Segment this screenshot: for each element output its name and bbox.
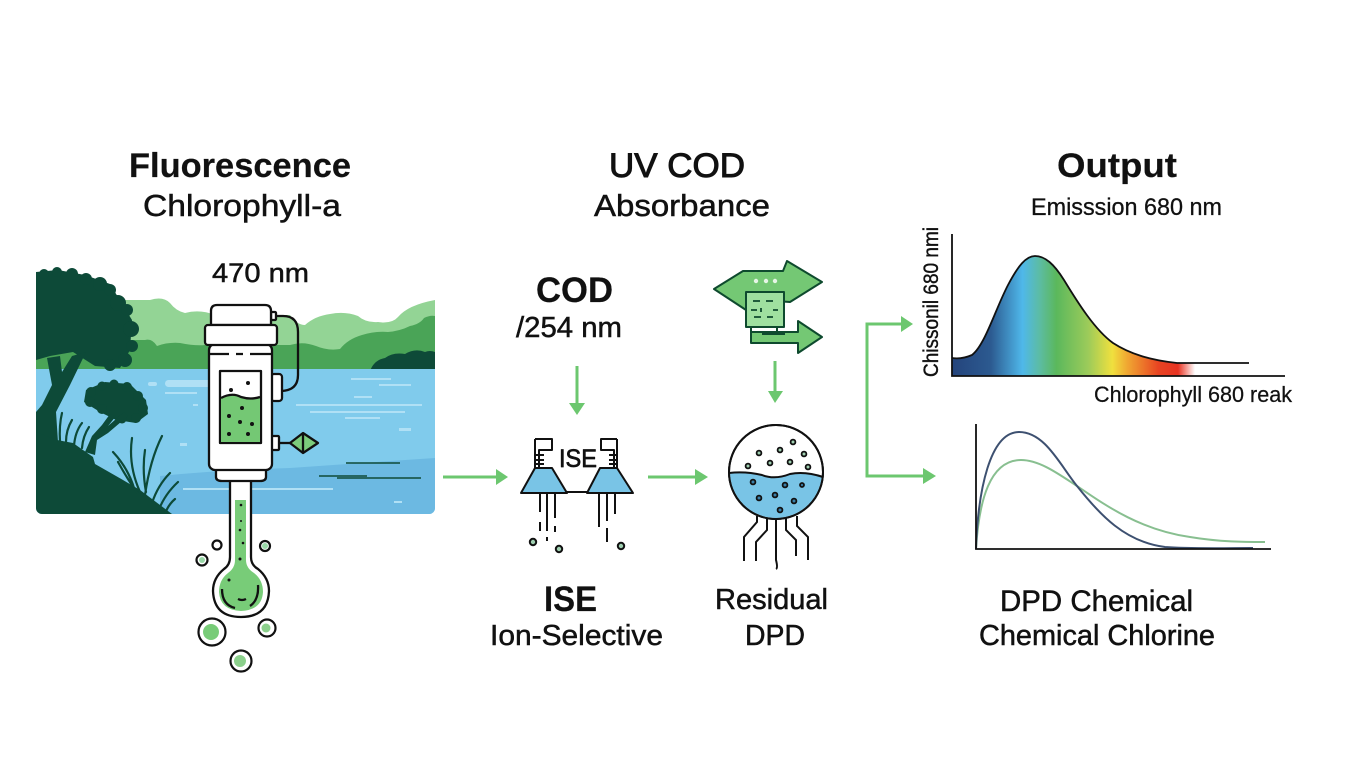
heading: Output: Output — [1057, 147, 1177, 185]
label: DPD Chemical Chlorine — [979, 585, 1215, 652]
heading: Fluorescence Chlorophyll-a: Chlorophyll-a — [143, 188, 342, 223]
dark water ripples — [319, 463, 421, 478]
arrow: lake to ISE — [443, 469, 508, 485]
icon: residual chlorine sphere — [728, 425, 824, 569]
chart: emission spectrum — [920, 227, 1293, 407]
label: 470 nm: 470 nm — [212, 258, 309, 288]
icon: ISE electrodes — [521, 439, 633, 552]
label: ISE Ion-Selective: Ion-Selective — [490, 620, 663, 652]
label: ISE Ion-Selective — [490, 580, 663, 652]
small tree — [84, 382, 148, 423]
label: Residual DPD: Residual — [715, 584, 828, 616]
label: DPD Chemical Chlorine: Chemical Chlorine — [979, 620, 1215, 652]
heading: UV COD Absorbance: UV COD — [609, 147, 745, 185]
cable — [274, 316, 298, 391]
label: ISE inside icon: ISE — [559, 445, 597, 473]
water — [36, 369, 435, 514]
dark shoreline, tree and reeds — [36, 267, 172, 514]
arrow: ISE to sphere — [648, 469, 708, 485]
label: COD /254 nm: COD — [536, 271, 613, 310]
lower neck — [216, 468, 266, 481]
light water streaks — [148, 378, 422, 503]
arrow: module down to sphere — [768, 361, 783, 403]
top cap — [211, 305, 271, 325]
label: Residual DPD: DPD — [745, 620, 805, 652]
heading: UV COD Absorbance: Absorbance — [594, 188, 770, 223]
heading: UV COD Absorbance — [594, 147, 770, 223]
arrow: branch to output charts — [867, 316, 936, 484]
heading: Output — [1031, 147, 1222, 221]
window — [220, 371, 261, 443]
panel: lake landscape — [36, 267, 435, 514]
heading: Output: Emisssion 680 nm — [1031, 194, 1222, 221]
label: COD /254 nm: /254 nm — [516, 312, 622, 344]
y axis label: Chissonil 680 nmi — [920, 227, 943, 377]
label: Residual DPD — [715, 584, 828, 652]
body — [209, 344, 272, 470]
icon: algae bubbles — [196, 540, 276, 672]
icon: fluorescence sensor probe — [205, 305, 318, 617]
heading: Fluorescence Chlorophyll-a: Fluorescence — [129, 147, 351, 185]
hills — [126, 298, 435, 350]
diamond emitter — [290, 433, 318, 453]
heading: Fluorescence Chlorophyll-a — [129, 147, 351, 223]
icon: circuit module with arrows — [714, 261, 822, 353]
stem and bulb — [213, 478, 269, 617]
label: DPD Chemical Chlorine: DPD Chemical — [1000, 585, 1193, 618]
arrow: COD down to ISE — [569, 366, 585, 415]
x axis label: Chlorophyll 680 reak — [1094, 382, 1293, 407]
label: ISE Ion-Selective: ISE — [544, 580, 597, 619]
label: COD /254 nm — [516, 271, 622, 344]
trunk — [36, 354, 83, 440]
collar — [205, 325, 277, 345]
chart: DPD response curves — [976, 424, 1271, 549]
ground — [36, 432, 172, 514]
